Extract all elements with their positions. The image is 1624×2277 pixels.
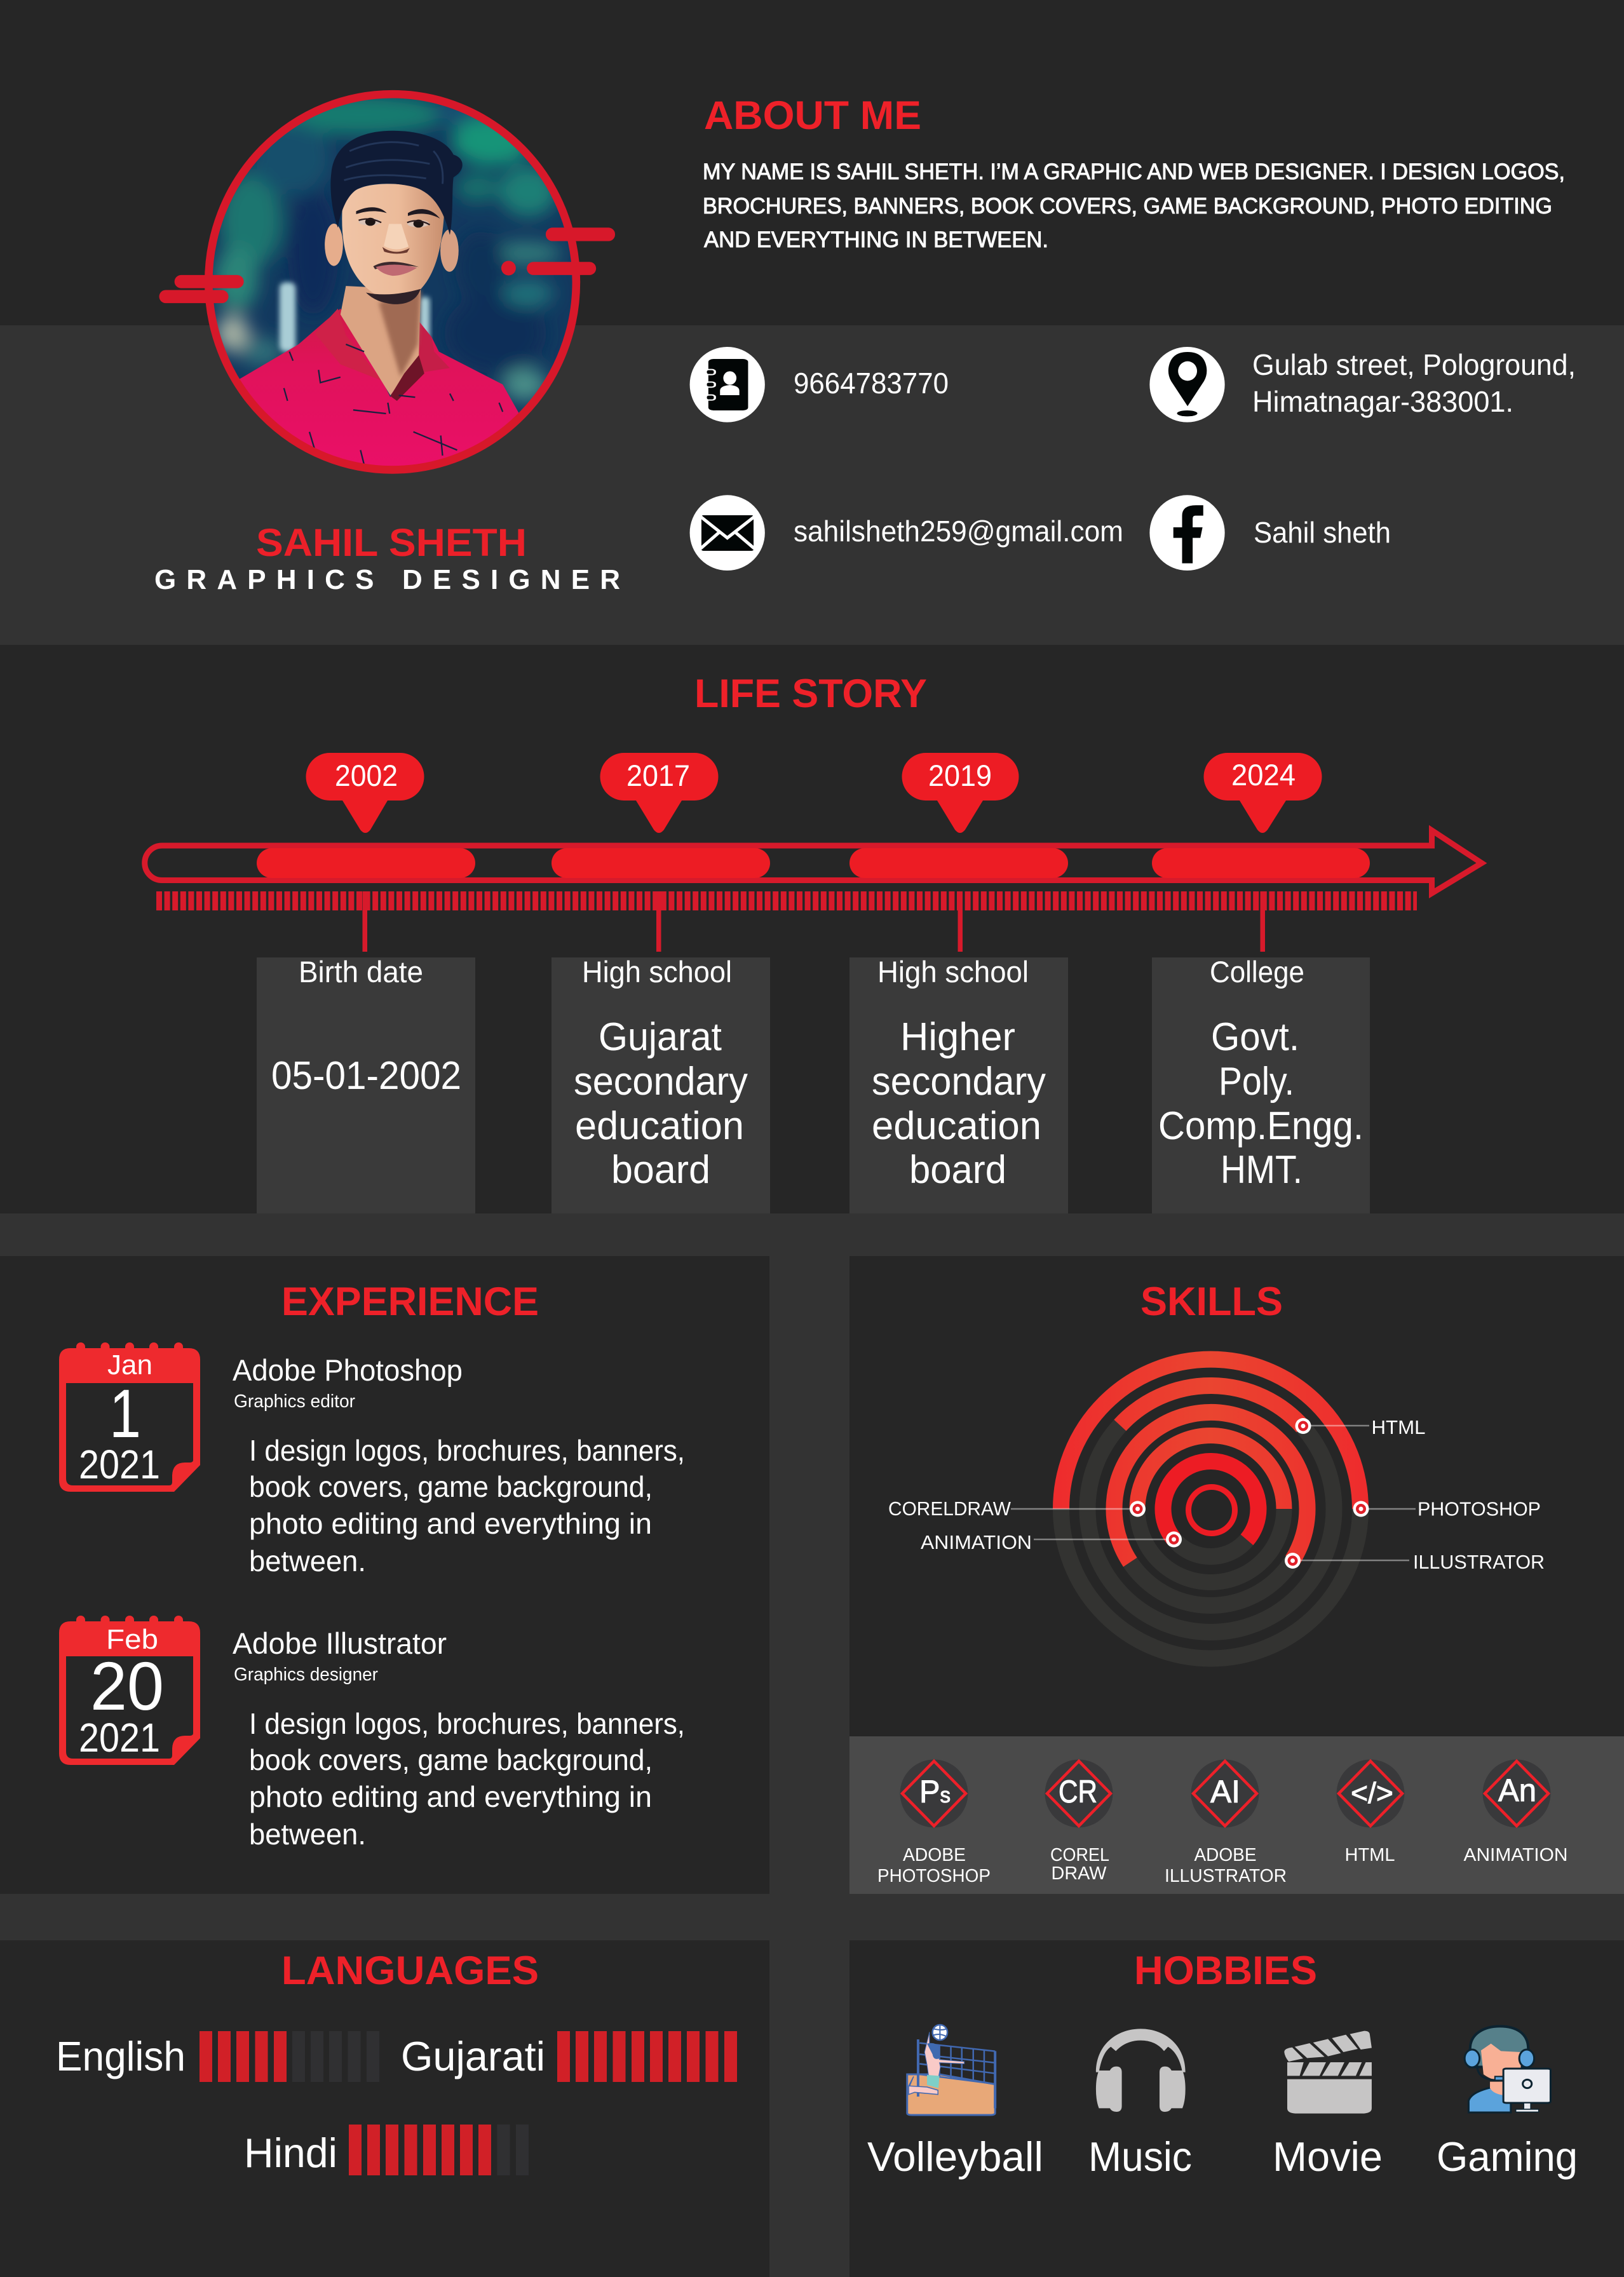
experience item: Photoshop: Graphics editor: [234, 1391, 355, 1412]
label: movie: Movie: [1273, 2133, 1383, 2180]
experience item: Photoshop: book covers, game background,: [249, 1470, 653, 1503]
connector 2024: [1261, 891, 1265, 952]
icon: envelope: [690, 495, 765, 571]
label: Adobe Photoshop: ADOBE: [903, 1845, 966, 1865]
pin 2002: 2002: [335, 759, 398, 792]
card: college: Comp.Engg.: [1158, 1104, 1363, 1148]
icon: Photoshop: [900, 1760, 968, 1827]
experience item: Photoshop: Adobe Photoshop: [233, 1353, 463, 1387]
pin 2019: [902, 753, 1019, 833]
card: high school: board: [611, 1148, 710, 1192]
experience item: Illustrator: between.: [249, 1818, 366, 1851]
facebook name: Sahil sheth: [1254, 516, 1391, 549]
arc: animation: [1163, 1461, 1258, 1540]
icon: Animation: [1483, 1760, 1550, 1827]
label: Adobe Photoshop: [877, 1845, 991, 1886]
timeline segment 2019: [849, 848, 1068, 878]
profile photo: [159, 89, 615, 476]
arc: html: [1120, 1386, 1303, 1427]
hobbies heading: HOBBIES: [1134, 1949, 1317, 1993]
card: high school 2: Higher: [900, 1015, 1015, 1059]
experience heading: EXPERIENCE: [281, 1280, 539, 1324]
label: Adobe Illustrator: ADOBE: [1194, 1845, 1257, 1865]
calendar: Feb 20 2021: 2021: [79, 1715, 160, 1760]
pin 2017: 2017: [626, 759, 690, 792]
connector 2019: [958, 891, 963, 952]
label: gaming: Gaming: [1437, 2133, 1578, 2180]
arc: photoshop: [1061, 1360, 1360, 1509]
card: high school 2: High school: [877, 955, 1029, 989]
panel: software icons band: [849, 1736, 1624, 1894]
pin 2002: [306, 753, 424, 833]
about text: BROCHURES, BANNERS, BOOK COVERS, GAME BACKGROUND, PHOTO EDITING: [703, 194, 1552, 219]
skills heading: SKILLS: [1140, 1280, 1283, 1324]
pin 2024: 2024: [1231, 758, 1296, 792]
language: Hindi: Hindi: [244, 2130, 337, 2176]
label: Animation: ANIMATION: [1464, 1845, 1568, 1865]
card: college: [1152, 955, 1370, 1213]
experience item: Photoshop: [233, 1353, 685, 1578]
address: Gulab street, Pologround,: [1252, 348, 1576, 381]
label: Corel Draw: DRAW: [1051, 1863, 1107, 1884]
center ring: [1188, 1487, 1235, 1534]
experience item: Photoshop: I design logos, brochures, banners,: [249, 1434, 685, 1467]
arc: coreldraw: [1137, 1436, 1284, 1509]
life story heading: LIFE STORY: [694, 672, 927, 716]
card: high school 2: board: [909, 1148, 1006, 1192]
experience item: Illustrator: Adobe Illustrator: [233, 1626, 447, 1660]
icon: CorelDRAW: CR: [1059, 1774, 1097, 1809]
phone number: 9664783770: [794, 367, 949, 400]
experience item: Photoshop: photo editing and everything in: [249, 1507, 652, 1540]
label: Adobe Illustrator: ILLUSTRATOR: [1165, 1866, 1287, 1886]
label: Corel Draw: COREL: [1050, 1845, 1109, 1865]
card: college: Poly.: [1219, 1060, 1294, 1104]
language: Hindi: [244, 2125, 529, 2176]
card: college: College: [1210, 955, 1304, 989]
skill chart labels: HTML: [1371, 1416, 1426, 1438]
card: high school: High school: [582, 955, 732, 989]
calendar: Jan 1 2021: Jan: [107, 1349, 152, 1381]
card: high school: secondary: [574, 1060, 748, 1104]
icon: HTML: [1337, 1760, 1404, 1827]
about text: MY NAME IS SAHIL SHETH. I’M A GRAPHIC AND WEB DESIGNER. I DESIGN LOGOS,: [703, 159, 1565, 184]
about text: [703, 159, 1565, 252]
name: SAHIL SHETH: [256, 521, 527, 564]
connector 2002: [362, 891, 367, 952]
contact band background: [0, 325, 1624, 645]
card: high school: Gujarat: [599, 1015, 722, 1059]
calendar: Feb 20 2021: 20: [90, 1647, 164, 1724]
icon: gamer: [1465, 2026, 1550, 2112]
label: Adobe Photoshop: PHOTOSHOP: [877, 1866, 991, 1886]
calendar: Jan 1 2021: 1: [109, 1375, 141, 1452]
icon: Illustrator: AI: [1210, 1774, 1240, 1809]
icon: HTML: </>: [1351, 1776, 1393, 1809]
calendar: Feb 20 2021: Feb: [106, 1624, 158, 1655]
experience item: Illustrator: Graphics designer: [234, 1665, 378, 1685]
icon: clapperboard: [1284, 2031, 1372, 2114]
experience item: Photoshop: between.: [249, 1544, 366, 1578]
timeline segment 2024: [1152, 848, 1370, 878]
icon: facebook: [1149, 495, 1225, 571]
calendar: Jan 1 2021: [59, 1342, 200, 1492]
icon: CorelDRAW: [1045, 1760, 1113, 1827]
icon: headphones: [1096, 2029, 1186, 2112]
about text: AND EVERYTHING IN BETWEEN.: [704, 227, 1048, 252]
language: English: English: [56, 2033, 186, 2079]
label: HTML: HTML: [1344, 1845, 1395, 1865]
timeline arrow: [145, 830, 1482, 893]
about heading: ABOUT ME: [704, 93, 921, 138]
label: Corel Draw: [1050, 1845, 1109, 1884]
address: [1252, 348, 1576, 418]
icon: Animation: An: [1498, 1773, 1536, 1808]
horizontal gutter below life story: [0, 1213, 1624, 1256]
card: college: Govt.: [1211, 1015, 1299, 1059]
skill markers: [1130, 1418, 1369, 1569]
skill chart labels: ILLUSTRATOR: [1413, 1551, 1545, 1573]
pin 2024: [1203, 753, 1322, 833]
connector 2017: [656, 891, 661, 952]
icon: volleyball: [907, 2025, 995, 2115]
languages heading: LANGUAGES: [281, 1949, 539, 1993]
experience item: Illustrator: book covers, game background,: [249, 1743, 653, 1776]
experience item: Illustrator: [233, 1626, 685, 1851]
skill chart labels: PHOTOSHOP: [1418, 1498, 1541, 1520]
icon: contact book: [690, 347, 765, 422]
skill chart labels: [888, 1416, 1545, 1573]
icon: Photoshop: Ps: [919, 1774, 951, 1809]
card: birth date: Birth date: [299, 955, 423, 989]
experience item: Illustrator: photo editing and everything in: [249, 1780, 652, 1813]
horizontal gutter above languages and hobbies: [0, 1894, 1624, 1940]
icon: location pin: [1149, 347, 1225, 422]
job title: GRAPHICS DESIGNER: [154, 564, 620, 595]
vertical gutter between panels: [769, 1213, 849, 2277]
card: high school 2: education: [872, 1104, 1041, 1148]
card: high school 2: [849, 955, 1068, 1213]
skill chart labels: ANIMATION: [921, 1531, 1032, 1553]
skill chart labels: CORELDRAW: [888, 1497, 1012, 1520]
icon: Illustrator: [1191, 1760, 1259, 1827]
card: birth date: [257, 955, 475, 1213]
timeline ruler ticks: [156, 891, 1417, 910]
card: high school: [551, 955, 770, 1213]
card: birth date: 05-01-2002: [271, 1054, 461, 1098]
card: college: HMT.: [1221, 1148, 1303, 1192]
experience item: Illustrator: I design logos, brochures, banners,: [249, 1707, 685, 1740]
language: English: [56, 2031, 379, 2082]
email: sahilsheth259@gmail.com: [794, 515, 1123, 548]
arc: illustrator: [1114, 1412, 1307, 1562]
pin 2017: [600, 753, 718, 833]
label: Adobe Illustrator: [1165, 1845, 1287, 1886]
card: high school: education: [575, 1104, 744, 1148]
language: Gujarati: Gujarati: [401, 2033, 545, 2079]
language: Gujarati: [401, 2031, 737, 2082]
radial skills chart: [1011, 1360, 1416, 1658]
label: music: Music: [1088, 2133, 1192, 2180]
calendar: Jan 1 2021: 2021: [79, 1442, 160, 1487]
card: high school 2: secondary: [872, 1060, 1046, 1104]
address: Himatnagar-383001.: [1252, 385, 1513, 418]
calendar: Feb 20 2021: [59, 1616, 200, 1765]
timeline segment 2017: [551, 848, 770, 878]
label: volleyball: Volleyball: [867, 2133, 1043, 2180]
timeline segment 2002: [257, 848, 475, 878]
pin 2019: 2019: [928, 759, 992, 792]
